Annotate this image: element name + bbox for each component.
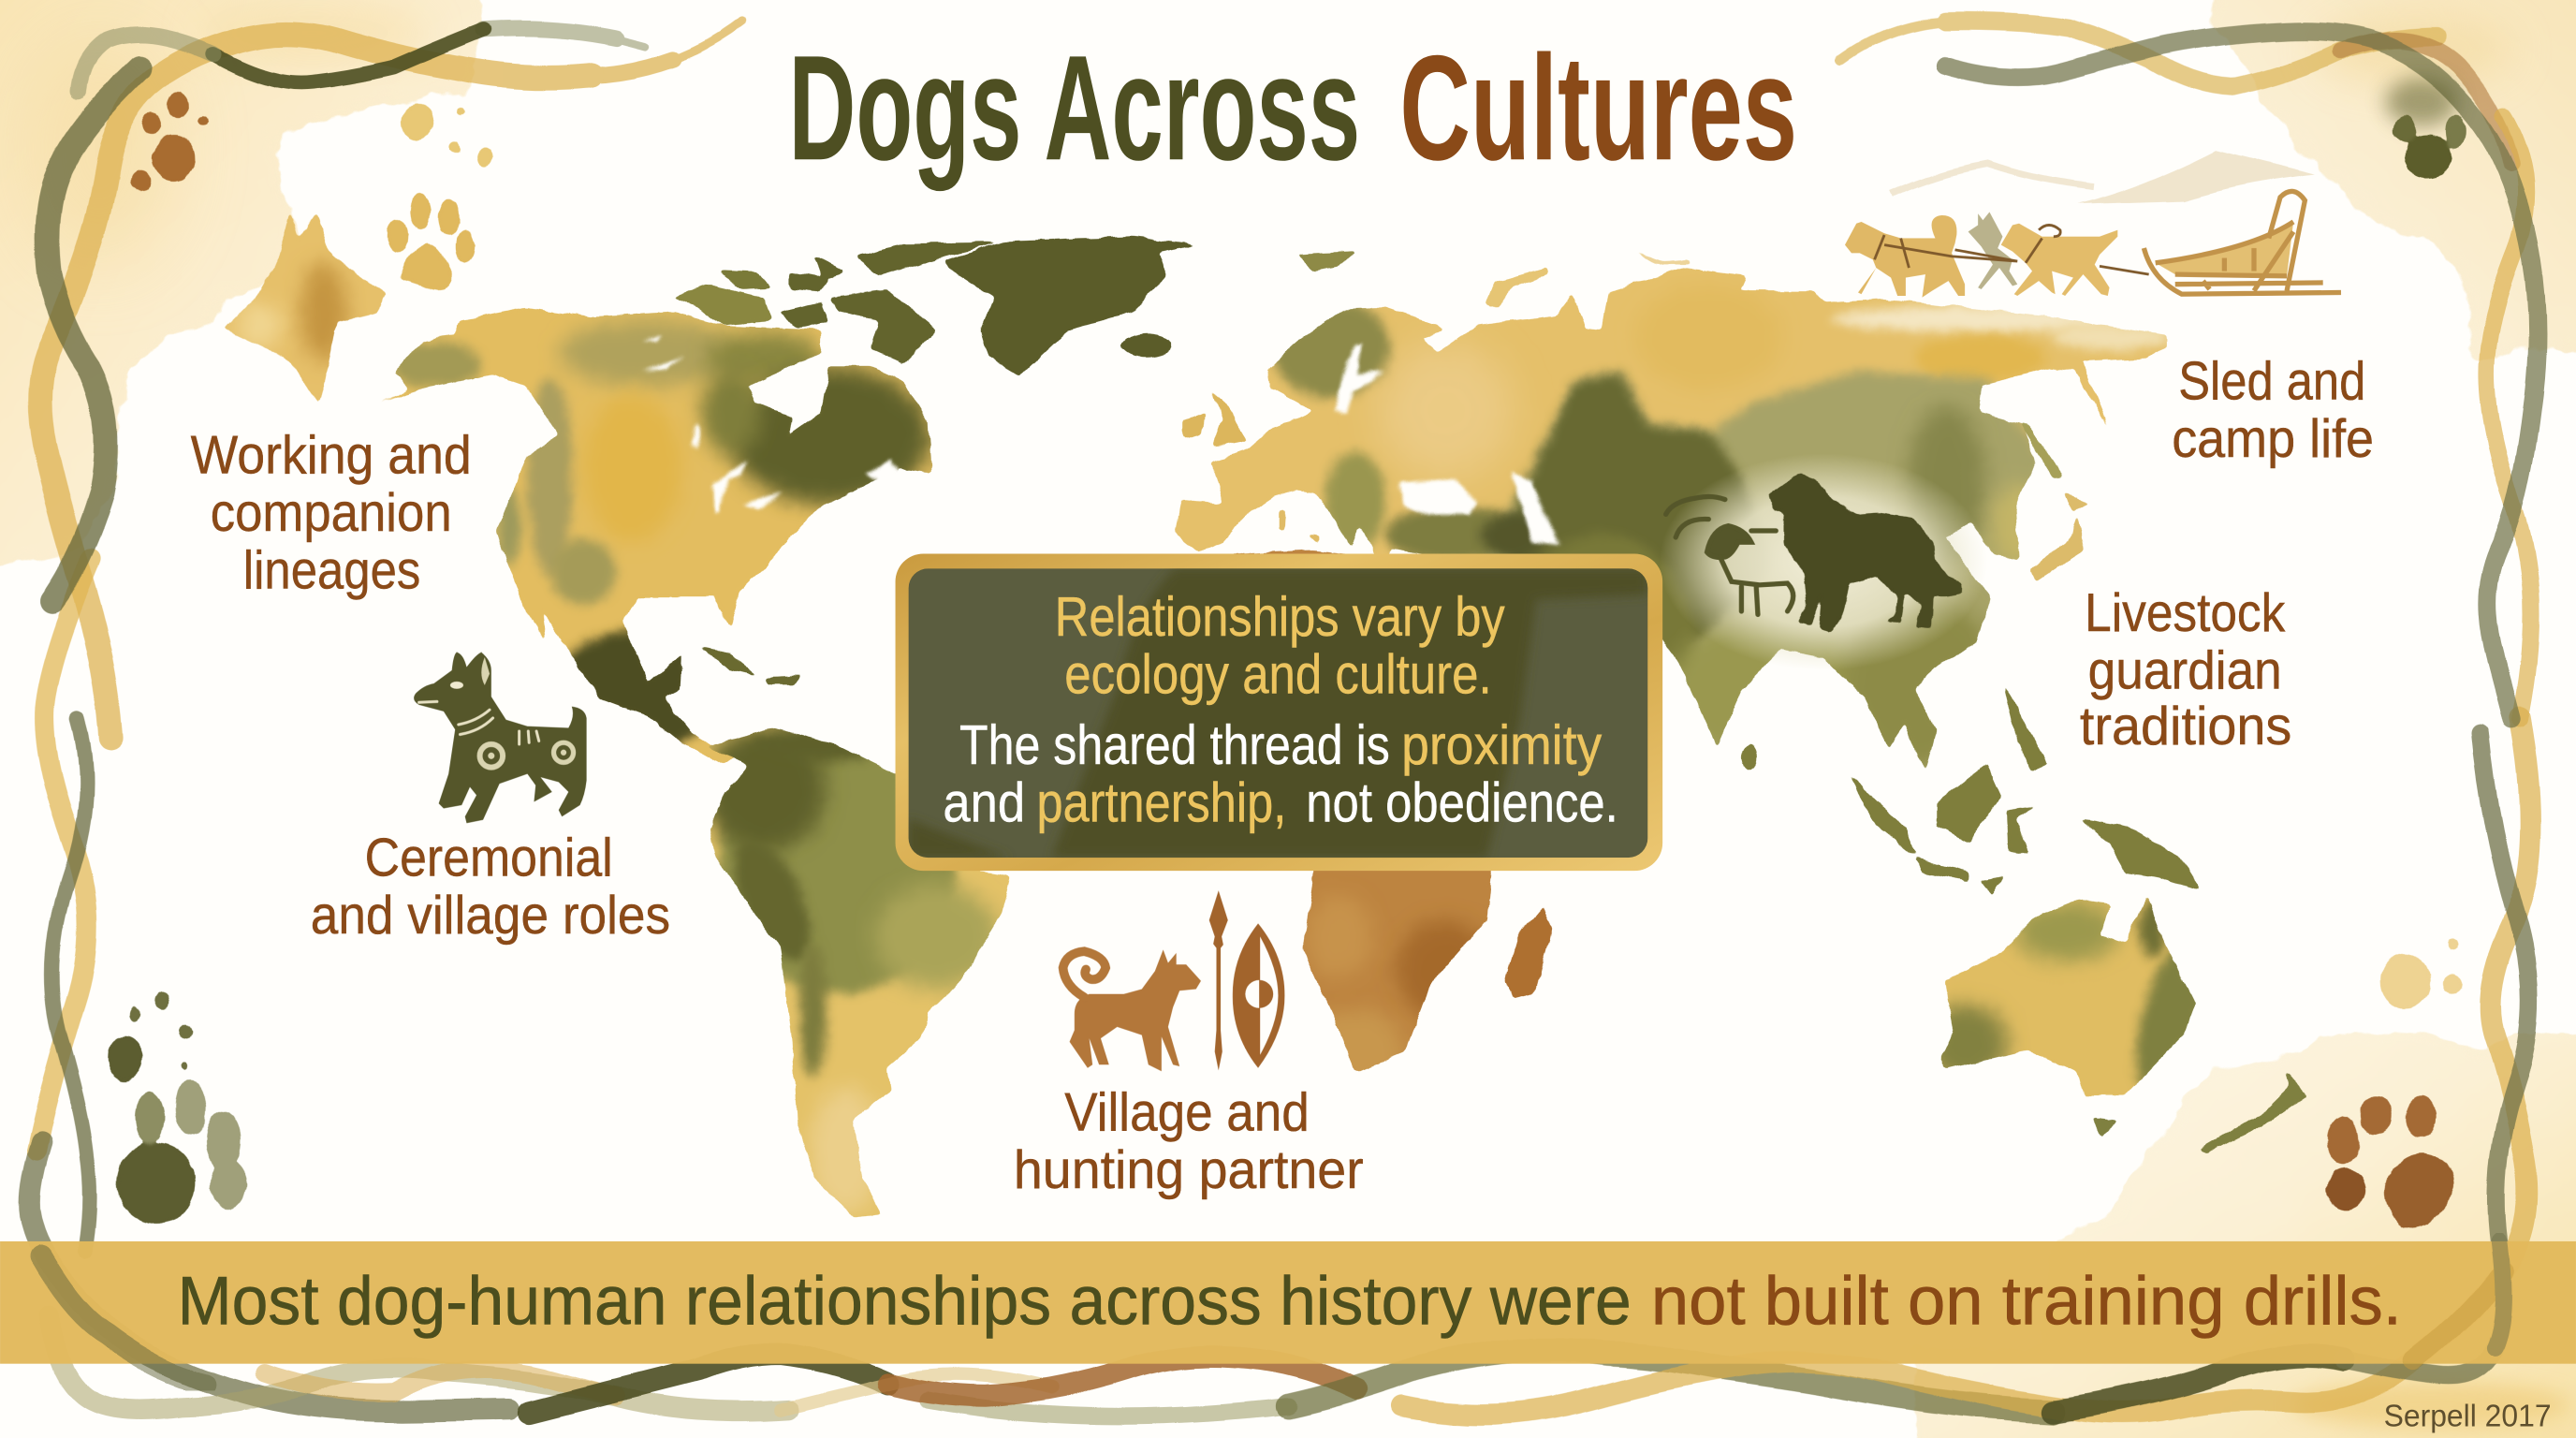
map: tasmania and new zealand (2093, 1070, 2308, 1153)
sled dog: lead (1845, 215, 1965, 298)
ribbons over banner (41, 1240, 2504, 1384)
map: south america (698, 723, 1018, 1224)
icon: german shepherd head (225, 213, 386, 402)
ribbon: gold top right (1841, 22, 2438, 87)
ribbon: olive top right (1945, 31, 2538, 720)
label: livestock guardian traditions: guardian (2088, 640, 2282, 700)
map: greenland (944, 237, 1199, 376)
world map (329, 237, 2308, 1224)
callout: second sentence: and (943, 771, 1025, 834)
ribbon: dark olive bottom (529, 1354, 887, 1413)
ribbon: dark olive top (213, 30, 485, 82)
label: sled and camp life (2172, 351, 2374, 469)
icon: spear (1209, 890, 1228, 1070)
callout: first sentence: ecology and culture. (1064, 643, 1492, 706)
ribbon: pale olive top (485, 28, 646, 46)
label: ceremonial and village roles: and village roles (311, 886, 670, 946)
icon: guardian dog (1767, 473, 1962, 633)
ribbon: brown bottom (887, 1357, 1357, 1397)
callout: second sentence: partnership, (1036, 771, 1286, 834)
callout: first sentence (1055, 585, 1505, 706)
ribbon: brown corner (2339, 40, 2511, 165)
gold drips, top left (401, 104, 493, 166)
map: arctic eurasian islands (1296, 248, 1692, 309)
icon: dog sled team (1845, 191, 2341, 298)
ribbon: pale lower-left (50, 1316, 788, 1412)
brown paw, bottom right (2326, 1096, 2454, 1229)
ribbon: olive lower-left (29, 1142, 509, 1412)
sled dog harness (1875, 225, 2149, 274)
gold drips, bottom right (2380, 938, 2463, 1009)
map: africa (1234, 549, 1492, 1071)
source credit: Serpell 2017 (2384, 1399, 2552, 1433)
ribbon: gold bottom right (1403, 718, 2531, 1415)
ribbon: gold lower-left (263, 1370, 616, 1397)
label: livestock guardian traditions: Livestock (2085, 583, 2286, 643)
map: british isles (1183, 388, 1247, 447)
sled dog: grey (1969, 212, 2017, 289)
sled (2156, 222, 2293, 276)
map: south-east asian islands (1741, 682, 2202, 895)
ribbon: pale olive corner (79, 36, 213, 91)
map: arctic islands (674, 242, 1003, 363)
label: livestock guardian traditions: traditions (2080, 697, 2291, 756)
centre callout box (896, 553, 1662, 871)
ribbon: gold right (2487, 115, 2531, 720)
ribbon: gold left lower (37, 559, 91, 1151)
label: village and hunting partner: Village and (1064, 1082, 1310, 1142)
map: north america (382, 307, 932, 764)
callout: gold frame (896, 553, 1662, 871)
banner: text: Most dog-human relationships across history were (178, 1262, 1632, 1340)
callout: second sentence: not obedience. (1306, 771, 1618, 834)
callout: second sentence (943, 713, 1618, 834)
ribbon: olive left (47, 69, 139, 600)
map: australia (1941, 897, 2196, 1097)
bottom banner (0, 1241, 2576, 1364)
title: Cultures (1399, 23, 1797, 191)
ribbon: pale gold bottom (781, 1375, 1051, 1410)
ribbon: gold top-left (39, 22, 742, 740)
ribbon: olive right lower (2343, 733, 2529, 1376)
callout: first sentence: Relationships vary by (1055, 585, 1505, 648)
label: livestock guardian traditions (2080, 583, 2291, 756)
icon: shield (1233, 923, 1284, 1068)
brown paw, top left (131, 92, 209, 191)
map: eurasia (1175, 268, 2168, 769)
map: caribbean islands (698, 647, 802, 685)
map: iceland (1122, 333, 1171, 357)
label: village and hunting partner: hunting partner (1014, 1140, 1364, 1200)
map: pale halo behind dog (1660, 453, 1988, 670)
label: working and companion lineages (191, 425, 472, 600)
ribbon: olive left lower (52, 720, 90, 1252)
ribbon: pale olive bottom (929, 1400, 1288, 1416)
sled dog: rear (2001, 224, 2117, 296)
olive paw and drips, bottom left (107, 990, 246, 1224)
banner: band (0, 1241, 2576, 1364)
icon: sheep (1666, 496, 1793, 614)
icon: ceremonial dog (414, 653, 587, 823)
label: working and companion lineages: Working and (191, 425, 472, 485)
mountains behind sled (1891, 150, 2315, 204)
icon: village dog (1063, 949, 1201, 1071)
label: working and companion lineages: companion (211, 483, 452, 543)
label: working and companion lineages: lineages (243, 540, 420, 600)
map: japan and sakhalin (2019, 422, 2089, 583)
title: Dogs Across (788, 23, 1360, 191)
smudged olive paw, top right (2385, 77, 2466, 178)
banner: text (178, 1262, 2402, 1340)
label: village and hunting partner (1014, 1082, 1364, 1200)
label: sled and camp life: Sled and (2178, 351, 2365, 411)
label: ceremonial and village roles (311, 828, 670, 946)
map: mediterranean islands (1280, 509, 1321, 544)
ribbon: olive bottom (1288, 1350, 2052, 1412)
ribbon: dark olive bottom right (2052, 1355, 2343, 1412)
callout: second sentence: The shared thread is (959, 713, 1390, 776)
icon: gold paw (388, 194, 475, 289)
label: ceremonial and village roles: Ceremonial (365, 828, 613, 888)
banner: text: not built on training drills. (1651, 1262, 2402, 1340)
label: sled and camp life: camp life (2172, 409, 2374, 469)
map: madagascar (1505, 905, 1553, 999)
callout: dark panel (909, 568, 1647, 858)
callout: second sentence: proximity (1401, 713, 1602, 776)
